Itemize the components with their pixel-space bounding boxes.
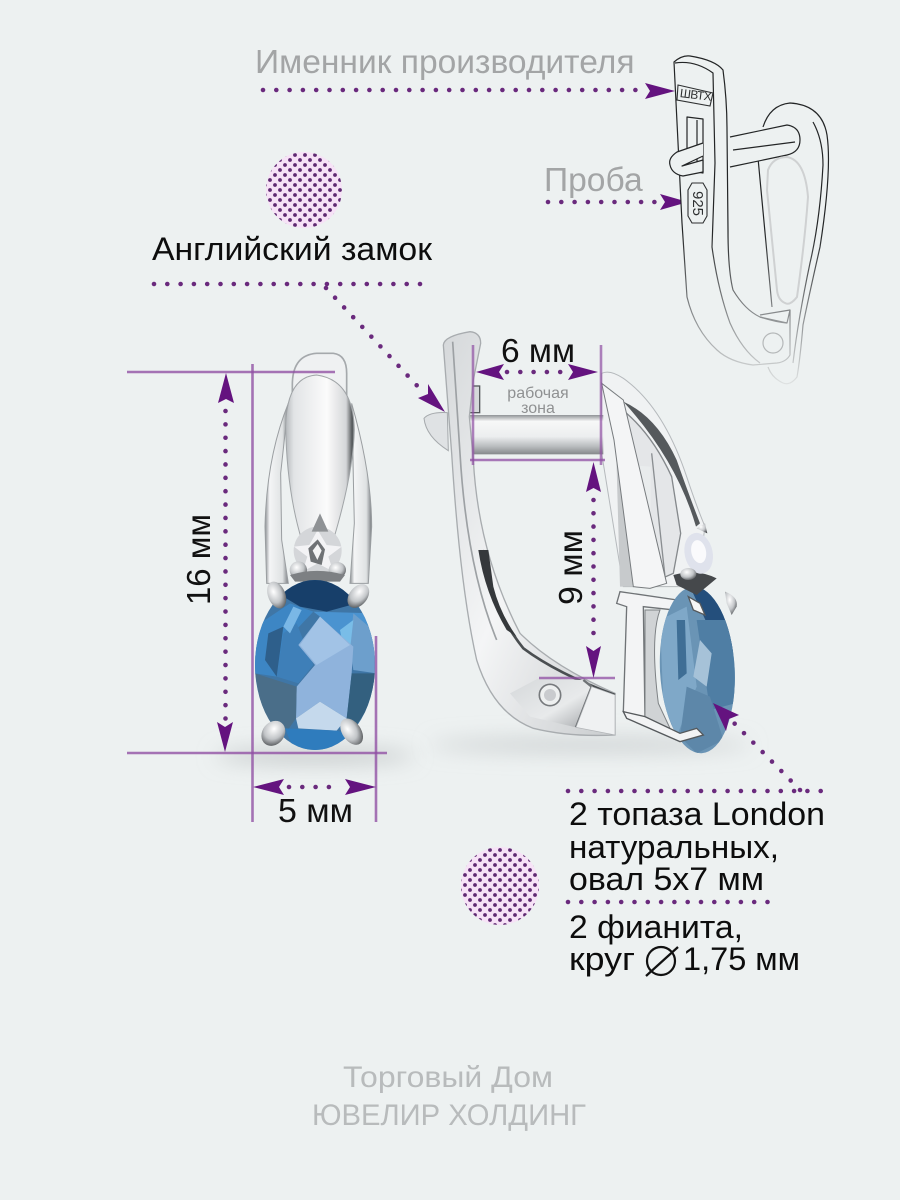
side zircon <box>673 523 717 595</box>
stones description: 2 фианита, <box>569 909 743 945</box>
heading: maker's mark: Именник производителя <box>255 44 635 81</box>
dimension: 6 mm working zone: 6 мм <box>501 332 575 369</box>
lower frame <box>617 592 705 720</box>
footer brand: Торговый Дом <box>343 1061 553 1094</box>
dimension: 16 mm height <box>127 372 387 753</box>
halftone circle top <box>266 152 342 228</box>
back arch <box>602 372 705 587</box>
front arm <box>443 332 615 735</box>
label: English lock: Английский замок <box>152 231 433 267</box>
topaz stone <box>253 578 377 752</box>
zircon stone <box>290 513 346 582</box>
stones description: овал 5х7 мм <box>569 861 764 897</box>
caption: working zone: рабочая <box>507 385 569 402</box>
stones description: 2 топаза London <box>569 796 825 832</box>
stones description: круг <box>569 941 635 977</box>
icon: diameter symbol <box>646 947 678 976</box>
dimension: 6 mm working zone <box>470 332 605 465</box>
dimension: 9 mm <box>539 462 615 678</box>
dimension: 16 mm height: 16 мм <box>180 514 217 605</box>
mark stamp: fineness <box>688 183 707 223</box>
rivet plate <box>510 678 592 727</box>
mark stamp: fineness: 925 <box>689 191 706 216</box>
dimension: 5 mm width: 5 мм <box>278 792 353 829</box>
arrow: topaz pointer <box>713 703 800 790</box>
arrow: lock pointer <box>326 288 445 412</box>
pin <box>470 415 603 454</box>
rivet <box>539 684 561 706</box>
line drawing: clasp with marks <box>670 56 828 384</box>
right earring, side view <box>424 332 740 757</box>
caption: working zone: зона <box>521 400 555 417</box>
heading: hallmark <box>544 162 688 210</box>
prongs <box>256 579 374 751</box>
side prongs and frame base <box>623 712 703 742</box>
dimension: 9 mm: 9 мм <box>552 530 589 605</box>
dimension: 5 mm width <box>252 364 376 829</box>
side topaz <box>660 589 735 754</box>
stones description <box>568 791 828 977</box>
stones description: 1,75 мм <box>683 941 800 977</box>
soft shadows under earrings <box>215 738 750 763</box>
stones description: натуральных, <box>569 829 779 865</box>
footer brand <box>312 1061 586 1132</box>
halftone circle bottom <box>461 847 539 925</box>
tab <box>424 413 448 451</box>
mark stamp: maker: ШВТХ <box>679 86 713 104</box>
left earring, front view <box>253 353 377 752</box>
heading: maker's mark <box>255 44 675 99</box>
caption: working zone <box>507 385 569 417</box>
heading: hallmark: Проба <box>544 162 643 199</box>
footer brand: ЮВЕЛИР ХОЛДИНГ <box>312 1099 586 1132</box>
